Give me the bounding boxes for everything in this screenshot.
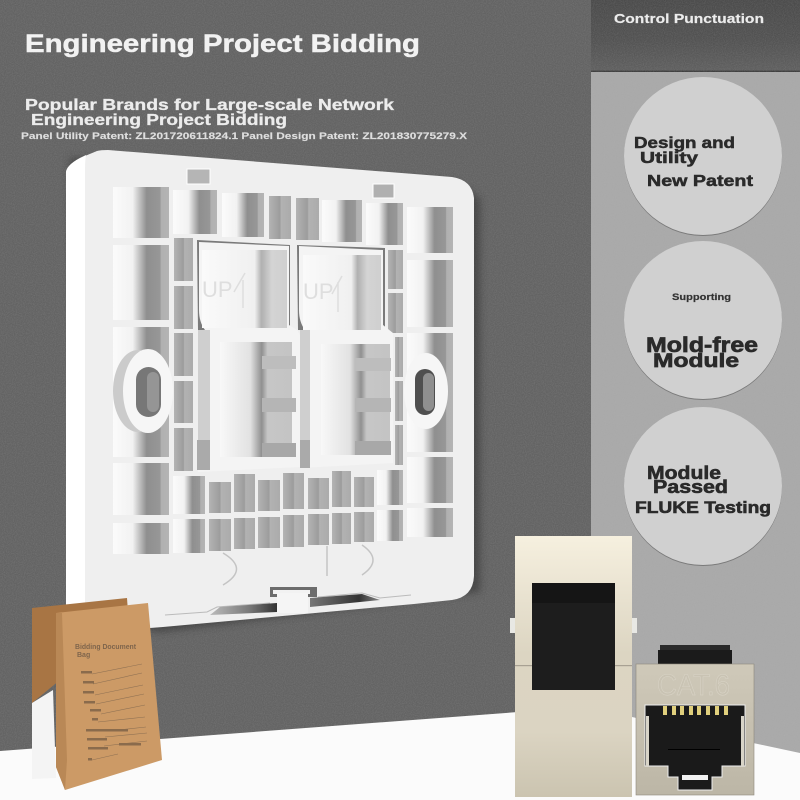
panel: white floor xyxy=(0,707,800,800)
badge: module passed fluke testing xyxy=(624,407,782,566)
bottom knockouts xyxy=(223,545,373,585)
icon: CAT.6 keystone jack front view xyxy=(636,645,754,795)
icon: bidding document bag: Bag xyxy=(77,652,90,659)
bag form labels xyxy=(81,671,141,760)
panel: control punctuation header band xyxy=(591,0,800,72)
badge: design and utility new patent xyxy=(624,77,782,236)
left module xyxy=(197,240,300,472)
icon: gold keystone module side view xyxy=(510,536,637,797)
embossed UP mark: UP xyxy=(303,279,334,304)
text block: patent numbers: Panel Utility Patent: ZL201720611824.1 Panel Design Patent: ZL201830775279.X xyxy=(21,131,468,142)
plate left edge xyxy=(66,155,86,628)
left mounting lug xyxy=(113,349,173,433)
text block: subtitle: Engineering Project Bidding xyxy=(31,112,287,129)
badge: module passed fluke testing: Passed xyxy=(653,477,728,497)
lower cell grid xyxy=(173,470,403,553)
badge: supporting mold-free module: Supporting xyxy=(672,292,731,302)
plate body xyxy=(66,150,474,628)
panel: light gray right column xyxy=(591,72,800,800)
icon: bidding document bag xyxy=(32,598,162,790)
heading: control punctuation: Control Punctuation xyxy=(614,11,764,26)
contact pins xyxy=(663,706,728,715)
text block: subtitle xyxy=(25,97,394,129)
bag label: Bidding Document xyxy=(75,644,137,651)
right module xyxy=(297,245,393,468)
text block: subtitle: Popular Brands for Large-scale Network xyxy=(25,97,394,114)
badge: module passed fluke testing: Module xyxy=(647,462,721,483)
narrow side cells xyxy=(174,238,403,471)
bag form lines xyxy=(92,664,147,760)
badge: supporting mold-free module: Module xyxy=(653,350,739,372)
panel: wall plate xyxy=(66,150,480,632)
badge: design and utility new patent: Utility xyxy=(640,150,699,167)
badge: supporting mold-free module: Mold-free xyxy=(646,333,758,357)
side clips xyxy=(510,618,516,633)
badge: design and utility new patent: Design and xyxy=(634,135,735,152)
badge: supporting mold-free module xyxy=(624,241,782,400)
top clip slots xyxy=(187,169,394,198)
badge: module passed fluke testing: FLUKE Testing xyxy=(635,498,771,517)
right mounting lug xyxy=(404,353,448,429)
plate shadow xyxy=(70,158,480,632)
embossed UP mark: UP xyxy=(202,277,233,302)
CAT.6 emboss: CAT.6 xyxy=(657,669,730,702)
ventilation cells, left and top xyxy=(113,187,453,554)
panel: dark wall background xyxy=(0,0,591,800)
RJ45 port xyxy=(645,705,745,790)
badge: design and utility new patent: New Patent xyxy=(647,173,754,190)
text block: main title: Engineering Project Bidding xyxy=(25,30,420,58)
black latch block xyxy=(532,583,615,690)
bottom latch and slot xyxy=(165,587,411,615)
